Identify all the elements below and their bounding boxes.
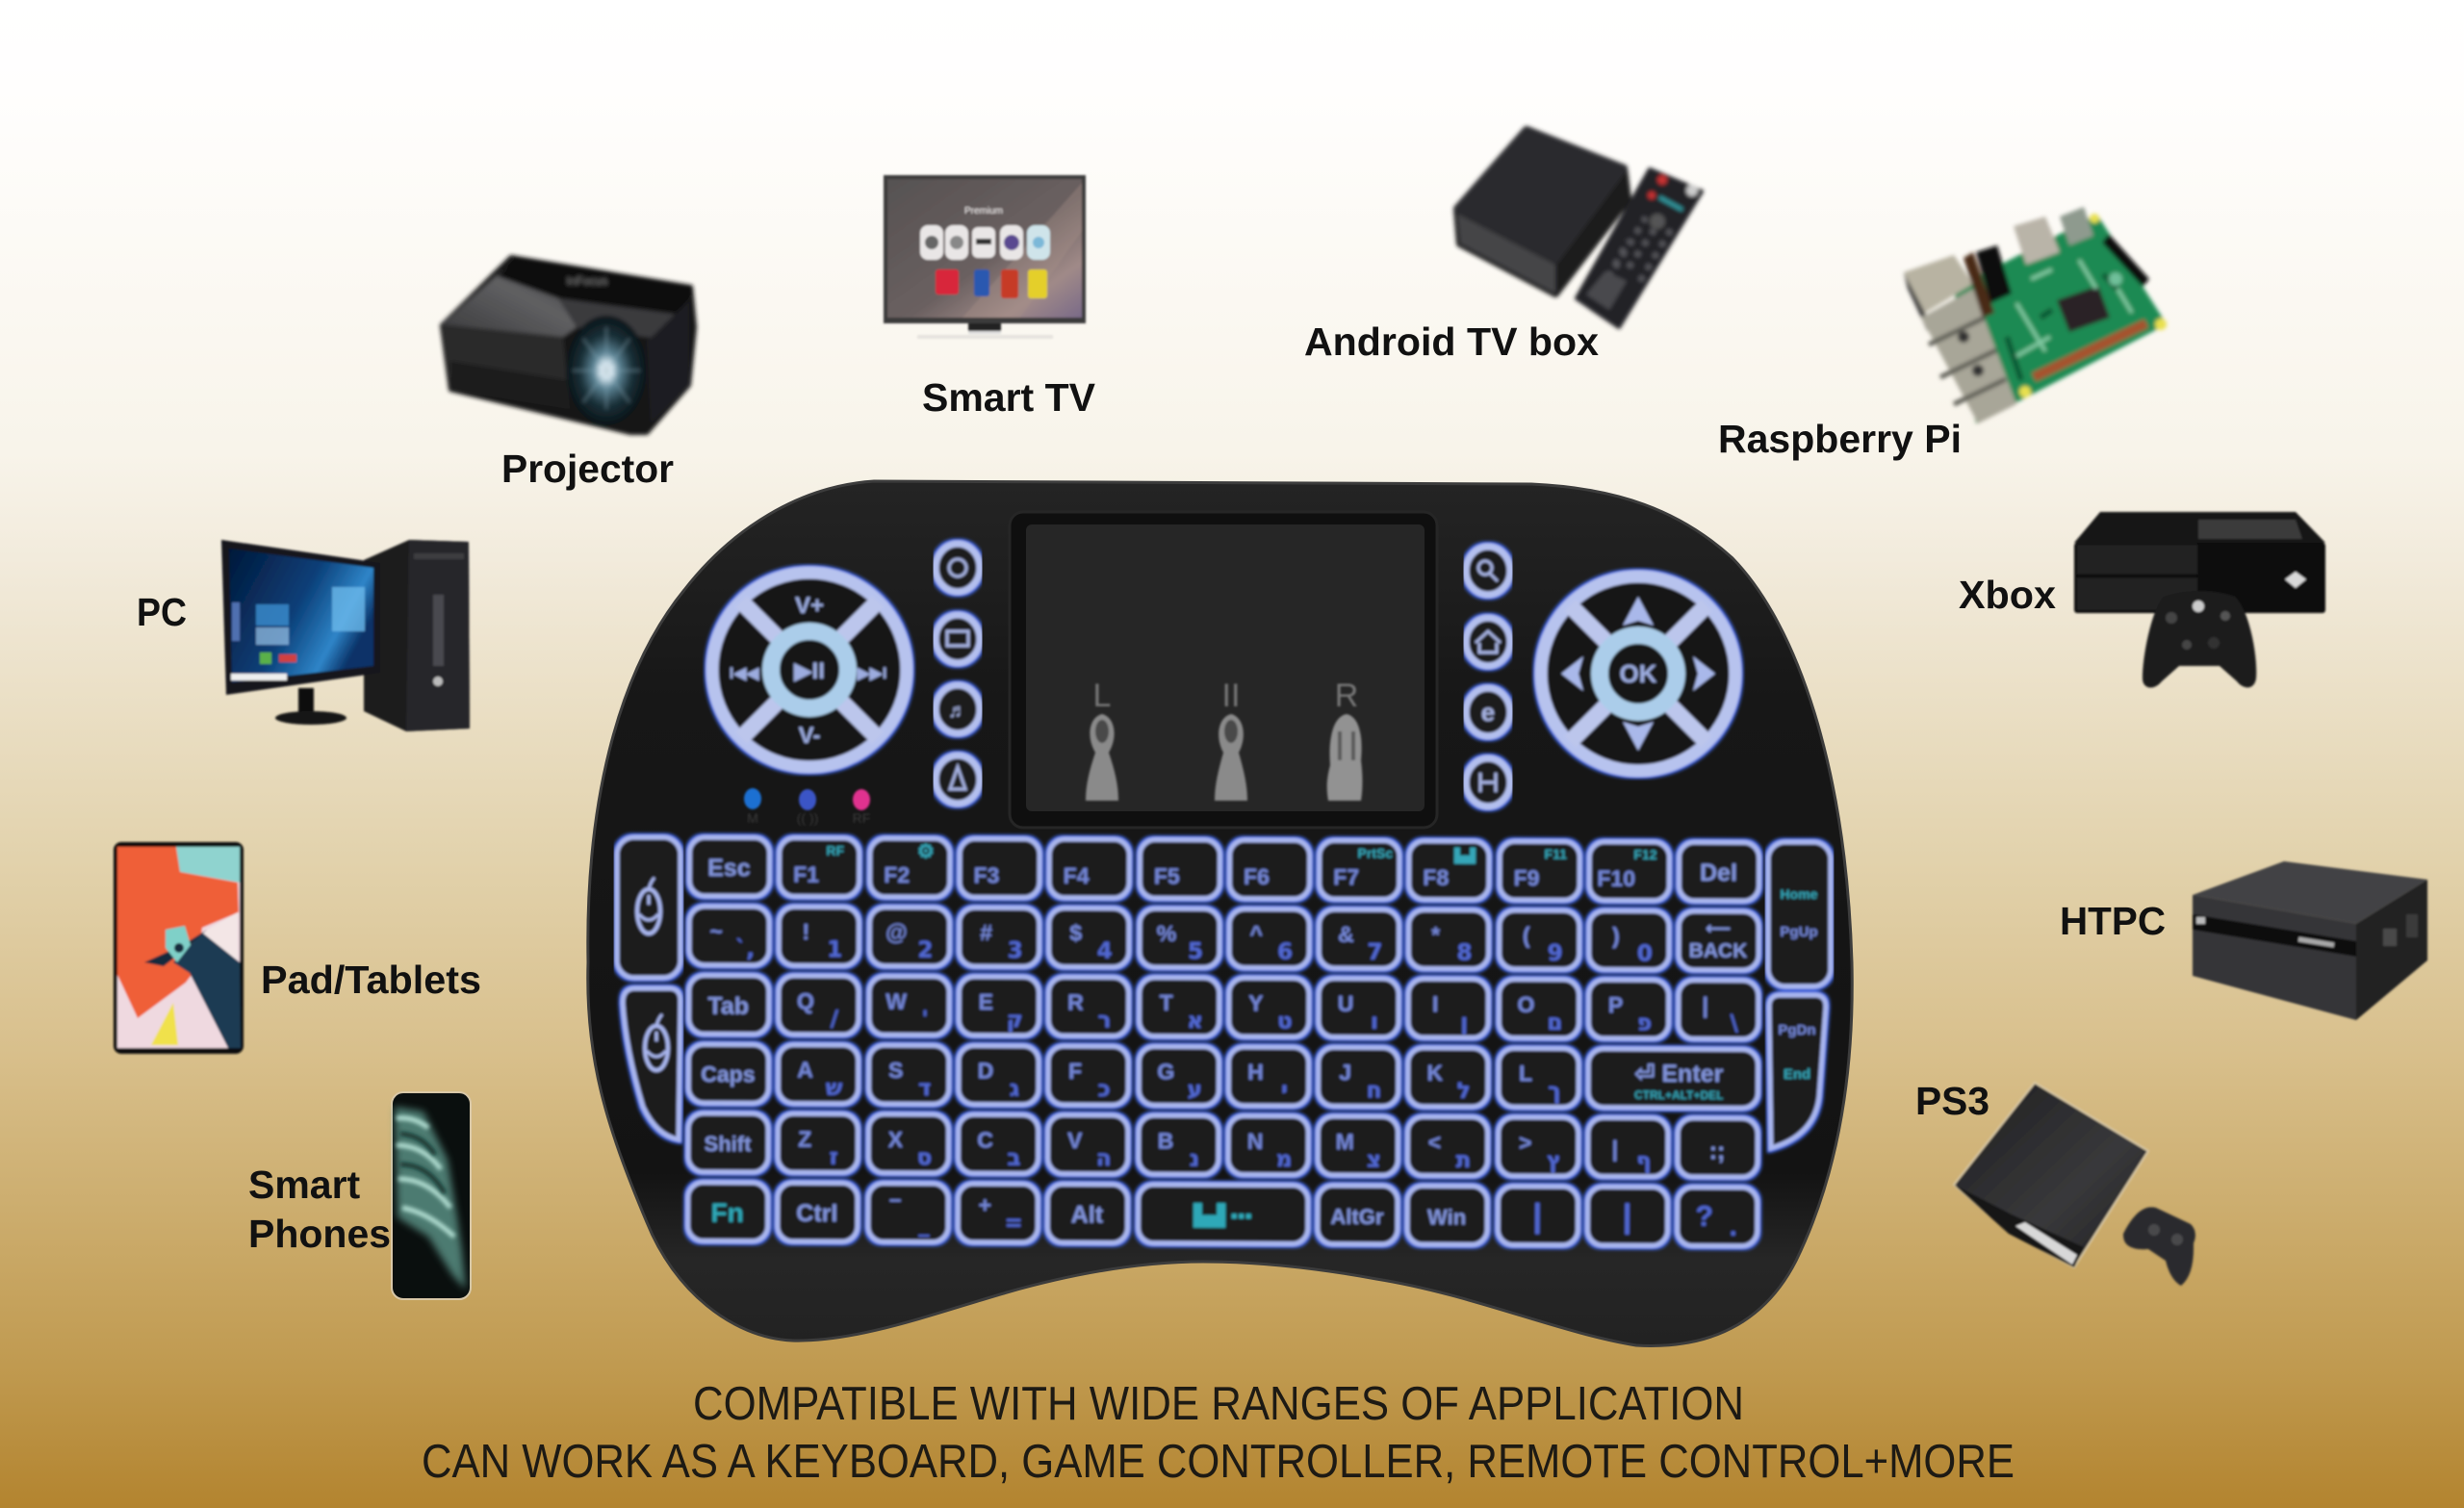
qwerty key row: I <box>1432 991 1438 1016</box>
home key row: ח <box>1367 1079 1382 1104</box>
qwerty key row: U <box>1338 991 1353 1016</box>
number key row: BACK <box>1689 940 1748 962</box>
home key row: J <box>1339 1060 1351 1085</box>
right side navigation keys <box>1768 842 1831 1148</box>
home key row: K <box>1426 1061 1444 1086</box>
icon: smart TV: Premium <box>964 206 1003 217</box>
bottom key row: Win <box>1427 1205 1466 1229</box>
bottom key row: | <box>1532 1198 1542 1235</box>
status LEDs: (( )) <box>797 810 818 826</box>
qwerty key row: W <box>886 988 907 1014</box>
shift key row: B <box>1158 1128 1173 1153</box>
number key row: 1 <box>827 937 842 962</box>
function key row: F6 <box>1244 864 1270 889</box>
number key row: 6 <box>1277 940 1293 965</box>
shift key row: C <box>977 1127 993 1152</box>
shift key row: | <box>1612 1137 1618 1162</box>
bottom key row: ? <box>1695 1201 1713 1233</box>
shift key row: Shift <box>704 1132 752 1156</box>
number key row: ! <box>802 919 809 944</box>
bottom key row: AltGr <box>1330 1205 1384 1229</box>
function key row: F1 <box>793 862 819 887</box>
left shortcut buttons <box>936 544 980 804</box>
bottom key row: . <box>1729 1216 1737 1241</box>
qwerty key row: T <box>1160 990 1173 1015</box>
number key row: ( <box>1523 923 1530 948</box>
number key row: `, <box>735 937 755 962</box>
shift key row: < <box>1428 1130 1441 1155</box>
number key row: 4 <box>1097 939 1113 964</box>
shift key row: ה <box>1096 1146 1112 1171</box>
home key row: L <box>1519 1061 1532 1086</box>
qwerty key row: O <box>1517 992 1534 1017</box>
number key row: * <box>1431 922 1440 948</box>
right dial: navigation: OK <box>1619 659 1657 688</box>
right side navigation keys: PgUp <box>1780 924 1818 940</box>
number key row: 3 <box>1008 938 1023 963</box>
number key row: 5 <box>1188 939 1203 964</box>
shift key row: X <box>888 1127 904 1152</box>
function key row: Esc <box>707 855 751 882</box>
icon: projector: InFocus <box>567 274 607 288</box>
label: Raspberry Pi: Raspberry Pi <box>1718 417 1962 461</box>
bottom key row: + <box>978 1192 991 1217</box>
function key row: F3 <box>973 862 999 888</box>
qwerty key row: Q <box>797 988 814 1013</box>
right side navigation keys: PgDn <box>1778 1022 1816 1038</box>
touchpad: II <box>1222 677 1240 714</box>
left dial: media controls: V- <box>799 723 820 749</box>
status LEDs: M <box>747 810 758 826</box>
icon: smart TV <box>884 175 1086 339</box>
icon: HTPC <box>2193 861 2427 1020</box>
home key row: H <box>1247 1060 1264 1085</box>
qwerty key row: / <box>831 1007 839 1032</box>
touchpad <box>1010 512 1437 828</box>
label: Xbox: Xbox <box>1959 573 2056 617</box>
home key row: CTRL+ALT+DEL <box>1634 1088 1724 1102</box>
shift key row: M <box>1336 1129 1354 1154</box>
left dial: media controls: V+ <box>795 593 824 619</box>
right side navigation keys: Home <box>1781 886 1818 902</box>
qwerty key row: E <box>979 989 993 1014</box>
number key row: % <box>1157 921 1176 946</box>
home key row: כ <box>1097 1077 1111 1102</box>
qwerty key row: Tab <box>707 993 749 1020</box>
shift key row: :; <box>1709 1137 1725 1164</box>
function key row: F11 <box>1544 846 1567 861</box>
function key row: F2 <box>884 862 910 887</box>
function key row: F8 <box>1423 865 1450 890</box>
shift key row: > <box>1519 1130 1531 1155</box>
qwerty key row: ק <box>1007 1008 1023 1033</box>
number key row: ) <box>1612 923 1620 948</box>
bottom key row: Ctrl <box>796 1200 837 1227</box>
qwerty key row: ר <box>1097 1009 1111 1034</box>
number key row <box>689 907 1758 970</box>
shift key row: ף <box>1636 1149 1652 1174</box>
function key row: ⚙ <box>917 841 935 862</box>
shift key row <box>688 1113 1758 1177</box>
function key row: Del <box>1700 859 1737 886</box>
number key row: $ <box>1069 921 1082 946</box>
bottom key row: Alt <box>1071 1201 1104 1229</box>
number key row: # <box>980 920 992 945</box>
bottom key row: Fn <box>710 1198 744 1228</box>
right side navigation keys: End <box>1784 1066 1810 1083</box>
qwerty key row <box>689 975 1758 1039</box>
number key row: @ <box>886 920 908 945</box>
number key row: & <box>1338 922 1354 947</box>
touchpad: R <box>1335 677 1358 714</box>
shift key row: ס <box>916 1145 932 1170</box>
qwerty key row: א <box>1187 1009 1203 1034</box>
home key row: A <box>797 1058 813 1083</box>
qwerty key row: ' <box>921 1008 929 1033</box>
number key row: 0 <box>1637 942 1653 967</box>
home key row: ⏎ Enter <box>1634 1061 1724 1087</box>
home key row <box>688 1044 1758 1109</box>
number key row: ⟵ <box>1706 919 1731 938</box>
home key row: ג <box>1010 1077 1019 1102</box>
home key row: ש <box>826 1076 843 1101</box>
qwerty key row: | <box>1702 993 1708 1018</box>
number key row: 2 <box>917 938 933 963</box>
number key row: ^ <box>1249 922 1263 947</box>
home key row: F <box>1068 1059 1082 1084</box>
bottom key row <box>687 1183 1758 1246</box>
home key row: S <box>888 1058 903 1083</box>
function key row: F5 <box>1154 863 1180 888</box>
qwerty key row: P <box>1608 992 1623 1017</box>
status LEDs <box>744 788 870 826</box>
icon: tablet <box>114 842 244 1054</box>
bottom key row: | <box>1623 1198 1631 1235</box>
function key row: F9 <box>1514 865 1540 890</box>
qwerty key row: פ <box>1637 1010 1652 1035</box>
label: Android TV box: Android TV box <box>1304 319 1599 364</box>
label: Smart Phones: Phones <box>248 1212 391 1256</box>
label: Pad/Tablets: Pad/Tablets <box>261 958 481 1002</box>
function key row <box>689 837 1759 901</box>
function key row: F4 <box>1064 863 1090 888</box>
qwerty key row: R <box>1067 989 1084 1014</box>
number key row: 9 <box>1548 941 1563 966</box>
left dial: media controls: ▶II <box>793 658 825 684</box>
function key row: F12 <box>1633 847 1657 862</box>
number key row: 7 <box>1367 940 1382 965</box>
key matrix <box>687 837 1759 1246</box>
home key row: G <box>1157 1060 1174 1085</box>
label: HTPC: HTPC <box>2060 899 2166 943</box>
bottom key row: ▙▟ ▪▪▪ <box>1193 1202 1252 1228</box>
shift key row: ץ <box>1547 1148 1561 1173</box>
icon: Android TV box <box>1457 130 1702 327</box>
home key row: ך <box>1548 1079 1561 1105</box>
home key row: י <box>1281 1078 1288 1103</box>
home key row: ד <box>918 1076 932 1101</box>
shift key row: ז <box>830 1145 838 1170</box>
caption line 2: CAN WORK AS A KEYBOARD, GAME CONTROLLER, REMOTE CONTROL+MORE <box>422 1436 2015 1488</box>
shift key row: ת <box>1456 1148 1471 1173</box>
left dial: media controls: ▶▶I <box>857 664 886 682</box>
shift key row: מ <box>1276 1147 1293 1172</box>
icon: desktop PC <box>221 540 470 731</box>
function key row: ▙▟ <box>1453 847 1476 864</box>
bottom key row: _ <box>918 1213 930 1238</box>
shift key row: V <box>1067 1128 1083 1153</box>
function key row: F7 <box>1333 864 1359 889</box>
left side mouse keys <box>617 837 680 1139</box>
icon: PS3 <box>1954 1083 2195 1286</box>
keyboard <box>588 481 1852 1345</box>
qwerty key row: Y <box>1248 990 1264 1015</box>
label: PS3: PS3 <box>1915 1079 1989 1123</box>
left dial: media controls: I◀◀ <box>730 664 759 682</box>
home key row: D <box>978 1059 993 1084</box>
shift key row: N <box>1247 1129 1264 1154</box>
icon: projector <box>442 257 695 433</box>
bottom key row: – <box>889 1187 902 1212</box>
function key row: RF <box>826 843 845 858</box>
keyboard body <box>588 481 1852 1345</box>
right shortcut buttons <box>1466 547 1510 806</box>
shift key row: Z <box>798 1126 811 1151</box>
number key row: 8 <box>1456 941 1473 966</box>
bottom key row: = <box>1004 1211 1023 1236</box>
label: PC: PC <box>137 590 187 634</box>
number key row: ~ <box>709 919 723 944</box>
label: Smart Phones: Smart <box>248 1163 360 1207</box>
left dial: media controls <box>712 573 907 767</box>
function key row: PrtSc <box>1358 845 1393 861</box>
home key row: Caps <box>701 1061 756 1086</box>
touchpad: L <box>1093 677 1111 714</box>
function key row: F10 <box>1597 866 1635 891</box>
qwerty key row: ם <box>1547 1010 1562 1035</box>
home key row: ל <box>1457 1079 1471 1104</box>
right dial: navigation <box>1541 576 1735 771</box>
qwerty key row: \ <box>1730 1011 1739 1036</box>
qwerty key row: ו <box>1371 1010 1378 1035</box>
right shortcut buttons: e <box>1481 698 1495 727</box>
status LEDs: RF <box>853 810 870 826</box>
shift key row: נ <box>1190 1146 1199 1171</box>
icon: smartphone <box>392 1092 471 1299</box>
shift key row: ב <box>1007 1145 1021 1170</box>
home key row: ע <box>1188 1078 1202 1103</box>
label: Projector: Projector <box>501 447 674 491</box>
qwerty key row: ן <box>1460 1010 1468 1035</box>
shift key row: צ <box>1367 1147 1381 1172</box>
left shortcut buttons: ♬ <box>948 701 967 722</box>
label: Smart TV: Smart TV <box>922 375 1096 420</box>
icon: Raspberry Pi <box>1904 207 2167 423</box>
qwerty key row: ט <box>1277 1009 1293 1034</box>
icon: Xbox <box>2074 512 2325 687</box>
caption line 1: COMPATIBLE WITH WIDE RANGES OF APPLICATION <box>693 1378 1744 1430</box>
